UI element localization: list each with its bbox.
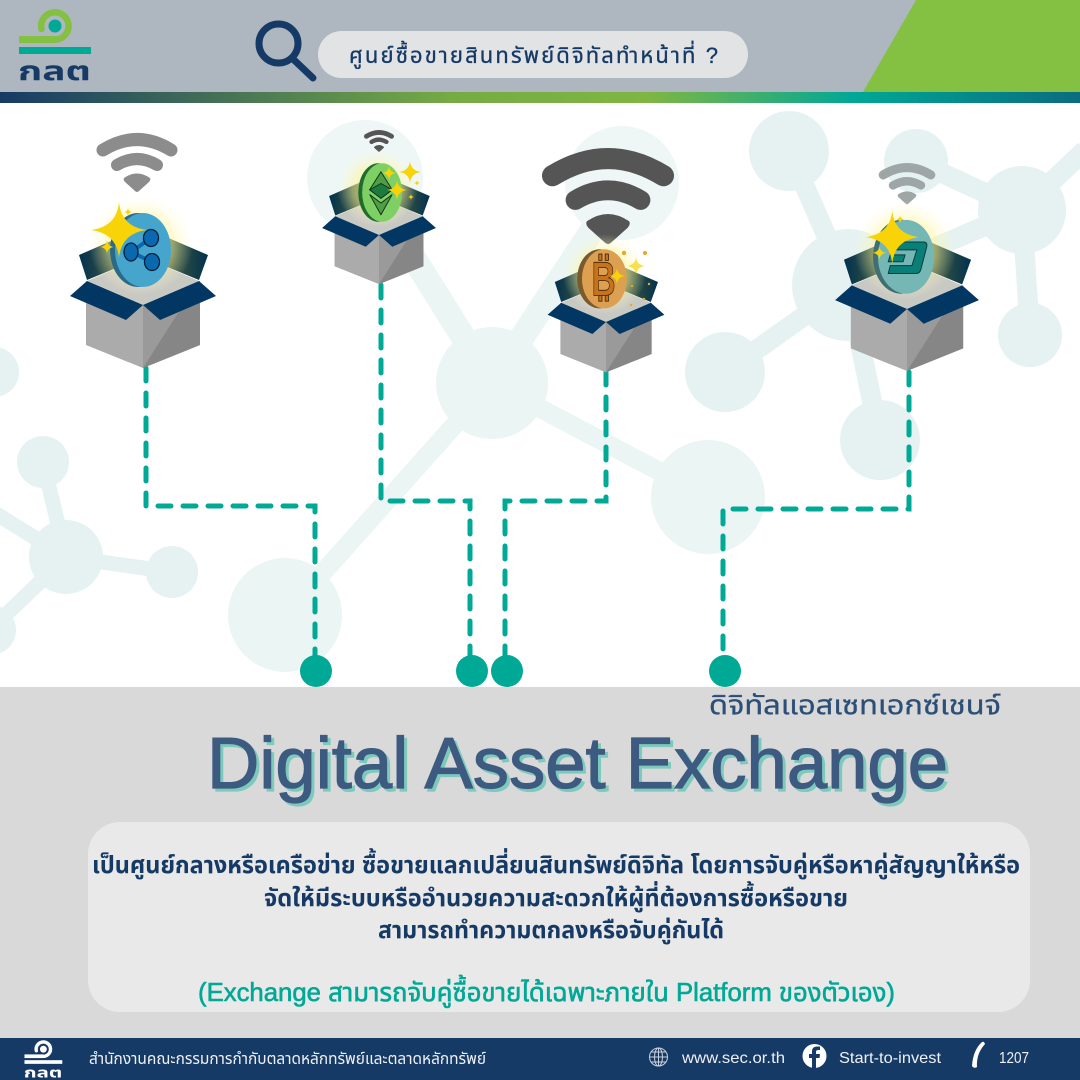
icon: telephone xyxy=(972,1042,985,1068)
description text: เป็นศูนย์กลางหรือเครือข่าย ซื้อขายแลกเปลี่ยนสินทรัพย์ดิจิทัล โดยการจับคู่หรือหาคู่สัญญาให้หรือ xyxy=(92,848,1020,880)
icon: facebook xyxy=(802,1044,826,1068)
description text: สามารถทำความตกลงหรือจับคู่กันได้ xyxy=(378,916,724,945)
wifi icon 2 xyxy=(366,132,392,152)
connector end dots xyxy=(300,655,741,687)
header band xyxy=(0,0,1080,103)
wifi icon 3 xyxy=(553,159,663,244)
crypto box 3: bitcoin coin xyxy=(548,234,664,372)
wifi icon 1 xyxy=(103,140,171,192)
sparkles on ethereum coin xyxy=(382,161,421,200)
title: Digital Asset Exchange: Digital Asset Exchange xyxy=(207,724,948,804)
crypto box 3: bitcoin coin: B xyxy=(592,254,616,307)
wifi icon 4 xyxy=(883,168,931,204)
dashed connector lines xyxy=(146,285,909,660)
search pill question: ศูนย์ซื้อขายสินทรัพย์ดิจิทัลทำหน้าที่ ? xyxy=(349,40,718,69)
description panel xyxy=(88,822,1030,1012)
footer facebook name: Start-to-invest xyxy=(839,1050,942,1067)
background molecule network xyxy=(0,111,1080,672)
crypto box 4: dash coin xyxy=(835,201,979,371)
crypto box 2: ethereum coin xyxy=(322,149,436,284)
footer phone number: 1207 xyxy=(999,1050,1029,1067)
bottom grey panel xyxy=(0,687,1080,1038)
search pill question xyxy=(318,31,748,78)
icon: globe xyxy=(650,1048,668,1066)
description text: จัดให้มีระบบหรืออำนวยความสะดวกให้ผู้ที่ต้องการซื้อหรือขาย xyxy=(264,881,848,913)
footer website: www.sec.or.th xyxy=(681,1050,785,1067)
description text xyxy=(92,848,1020,945)
footer organisation name: สำนักงานคณะกรรมการกำกับตลาดหลักทรัพย์และตลาดหลักทรัพย์ xyxy=(89,1051,486,1068)
logo: SEC Thailand xyxy=(18,12,91,86)
footer band xyxy=(0,1038,1080,1080)
icon: magnifying glass xyxy=(259,24,313,78)
teal note: (Exchange สามารถจับคู่ซื้อขายได้เฉพาะภายใน Platform ของตัวเอง) xyxy=(198,974,895,1008)
thai subtitle: ดิจิทัลแอสเซทเอกซ์เชนจ์ xyxy=(709,690,1001,720)
logo: SEC Thailand: กลต xyxy=(18,56,91,86)
footer logo xyxy=(24,1042,62,1080)
title: Digital Asset Exchange: Digital Asset Exchange xyxy=(210,727,951,807)
sparkles on bitcoin coin xyxy=(609,251,650,306)
crypto box 1: ripple coin xyxy=(70,195,216,368)
